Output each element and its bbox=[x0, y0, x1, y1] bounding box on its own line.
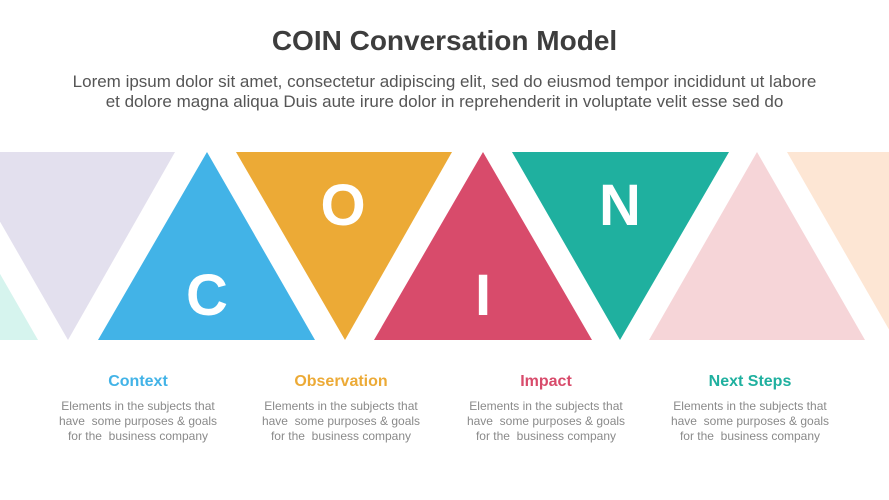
triangle: O orange bbox=[236, 152, 452, 340]
column: Context bbox=[59, 373, 217, 443]
column: Next Steps: have some purposes & goals bbox=[671, 414, 829, 428]
column: Observation: Observation bbox=[294, 373, 388, 390]
triangle: I red: I bbox=[475, 263, 491, 328]
column: Impact: Impact bbox=[520, 373, 572, 390]
column: Context: have some purposes & goals bbox=[59, 414, 217, 428]
column: Impact: for the business company bbox=[476, 429, 616, 443]
triangle: I red bbox=[374, 152, 592, 340]
column: Observation bbox=[262, 373, 420, 443]
subtitle: Lorem ipsum dolor sit amet, consectetur adipiscing elit, sed do eiusmod tempor incididunt ut labore bbox=[73, 72, 816, 91]
triangle: peach faded bbox=[787, 152, 889, 340]
column: Observation: for the business company bbox=[271, 429, 411, 443]
column: Next Steps: Next Steps bbox=[709, 373, 791, 390]
subtitle: et dolore magna aliqua Duis aute irure dolor in reprehenderit in voluptate velit esse sed do bbox=[106, 92, 783, 111]
column: Impact: Elements in the subjects that bbox=[469, 399, 623, 413]
column: Next Steps: Elements in the subjects that bbox=[673, 399, 827, 413]
triangle: C blue: C bbox=[186, 263, 228, 328]
triangle: N teal: N bbox=[599, 173, 641, 238]
subtitle bbox=[73, 72, 816, 111]
column: Next Steps bbox=[671, 373, 829, 443]
triangle: C blue bbox=[98, 152, 315, 340]
column: Next Steps: for the business company bbox=[680, 429, 820, 443]
column: Observation: have some purposes & goals bbox=[262, 414, 420, 428]
triangle: N teal bbox=[512, 152, 729, 340]
triangle: purple faded bbox=[0, 152, 175, 340]
column: Context: Elements in the subjects that bbox=[61, 399, 215, 413]
column: Context: Context bbox=[108, 373, 168, 390]
column: Impact: have some purposes & goals bbox=[467, 414, 625, 428]
triangle: pink faded bbox=[649, 152, 865, 340]
column: Impact bbox=[467, 373, 625, 443]
triangle: mint faded bbox=[0, 152, 38, 340]
column: Observation: Elements in the subjects that bbox=[264, 399, 418, 413]
triangle: O orange: O bbox=[320, 173, 366, 238]
column: Context: for the business company bbox=[68, 429, 208, 443]
title: COIN Conversation Model bbox=[272, 25, 617, 56]
